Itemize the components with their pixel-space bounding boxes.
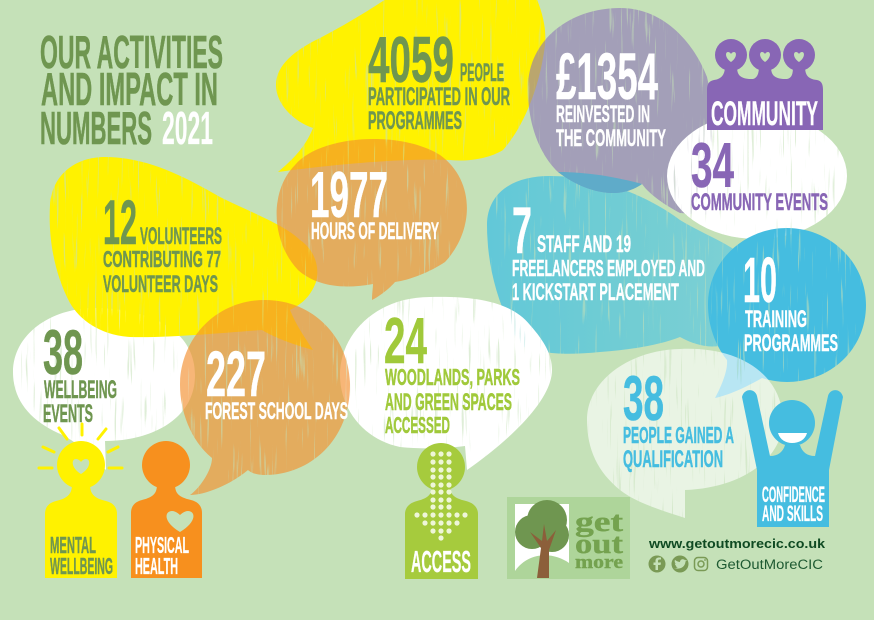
stat: 4059 people: PROGRAMMES: [368, 107, 462, 135]
stat: 10 training programmes: [743, 244, 838, 357]
stat: 1354 pounds reinvested: THE COMMUNITY: [556, 125, 666, 152]
icon: access figure: ACCESS: [411, 544, 471, 579]
stat: 24 green spaces: AND GREEN SPACES: [385, 389, 512, 416]
icon: access figure: [405, 443, 478, 579]
title: 2021: [162, 102, 213, 154]
stat: 1354 pounds reinvested: REINVESTED IN: [556, 101, 650, 128]
stat: 1354 pounds reinvested: [556, 39, 666, 152]
stat: 7 staff: FREELANCERS EMPLOYED AND: [512, 255, 705, 281]
website url: www.getoutmorecic.co.uk: [648, 536, 826, 551]
panel: woodlands bubble: [340, 297, 552, 470]
panel: qualification bubble: [587, 349, 783, 518]
panel: 4059 people bubble: [276, 0, 545, 172]
stat: 10 training programmes: 10: [743, 244, 777, 316]
social icons: [648, 556, 708, 572]
stat: 7 staff: 1 KICKSTART PLACEMENT: [512, 279, 679, 306]
stat: 34 community events: 34: [691, 131, 734, 201]
icon: physical health figure: PHYSICAL: [135, 532, 189, 558]
stat: 4059 people: PARTICIPATED IN OUR: [368, 83, 510, 111]
title: NUMBERS: [40, 102, 152, 154]
logo: Get Out More: out: [575, 528, 623, 560]
panel: staff bubble: [487, 176, 735, 354]
icon: mental wellbeing figure: MENTAL: [50, 532, 96, 558]
stat: 24 green spaces: WOODLANDS, PARKS: [385, 364, 520, 390]
panel: volunteers bubble: VOLUNTEERS: [140, 223, 222, 250]
icon: mental wellbeing figure: WELLBEING: [50, 553, 113, 579]
icon: physical health figure: [131, 441, 202, 579]
icon: mental wellbeing figure: [39, 424, 122, 579]
stat: 38 qualifications: [623, 364, 734, 473]
stat: 1977 hours: 1977: [310, 158, 388, 231]
icon: confidence and skills figure: [742, 390, 843, 527]
panel: 4059 people bubble: PEOPLE: [460, 59, 504, 87]
stat: 12 volunteers: VOLUNTEER DAYS: [103, 271, 218, 298]
stat: 227 forest school days: [205, 338, 348, 425]
logo: Get Out More: more: [575, 552, 623, 573]
logo: Get Out More: get: [575, 506, 623, 538]
stat: 7 staff: 7: [512, 193, 532, 267]
stat: 7 staff: STAFF AND 19: [537, 231, 631, 258]
stat: 4059 people: 4059: [368, 23, 454, 96]
stat: 4059 people: [368, 23, 510, 135]
stat: 38 qualifications: PEOPLE GAINED A: [623, 422, 734, 448]
panel: wellbeing events bubble: WELLBEING: [44, 376, 117, 404]
panel: wellbeing events bubble: [13, 308, 195, 470]
overlap: purple and teal: [558, 172, 642, 193]
stat: 1977 hours: HOURS OF DELIVERY: [311, 218, 439, 245]
stat: 34 community events: [691, 131, 828, 216]
panel: 1354 pounds bubble: [528, 8, 712, 215]
stat: 227 forest school days: 227: [206, 338, 266, 410]
icon: community figures: [707, 39, 823, 133]
text: OUR ACTIVITIES: [40, 26, 223, 78]
panel: forest school bubble: [180, 300, 350, 495]
stat: 24 green spaces: [384, 304, 520, 438]
stat: 38 wellbeing events: [43, 318, 117, 428]
stat: 12 volunteers: 12: [103, 188, 137, 258]
stat: 38 wellbeing events: 38: [43, 318, 83, 388]
stat: 24 green spaces: ACCESSED: [385, 412, 450, 438]
icon: physical health figure: HEALTH: [135, 553, 178, 579]
stat: 38 qualifications: QUALIFICATION: [623, 446, 723, 473]
social handle: GetOutMoreCIC: [716, 557, 823, 572]
stat: 12 volunteers: [103, 188, 222, 298]
stat: 227 forest school days: FOREST SCHOOL DAYS: [205, 398, 348, 425]
panel: volunteers bubble: [50, 157, 317, 350]
panel: hours of delivery bubble: [277, 139, 467, 300]
stat: 10 training programmes: TRAINING: [745, 306, 807, 333]
stat: 24 green spaces: 24: [384, 304, 427, 377]
stat: 12 volunteers: CONTRIBUTING 77: [103, 246, 221, 272]
stat: 38 wellbeing events: EVENTS: [43, 400, 93, 428]
panel: training bubble: [708, 228, 866, 398]
panel: community events bubble: [667, 113, 847, 239]
logo: Get Out More: [507, 497, 630, 579]
stat: 38 qualifications: 38: [623, 364, 664, 434]
title: [40, 26, 223, 154]
stat: 1354 pounds reinvested: £1354: [556, 39, 658, 113]
title: AND IMPACT IN: [41, 63, 218, 115]
stat: 7 staff: [512, 193, 705, 306]
